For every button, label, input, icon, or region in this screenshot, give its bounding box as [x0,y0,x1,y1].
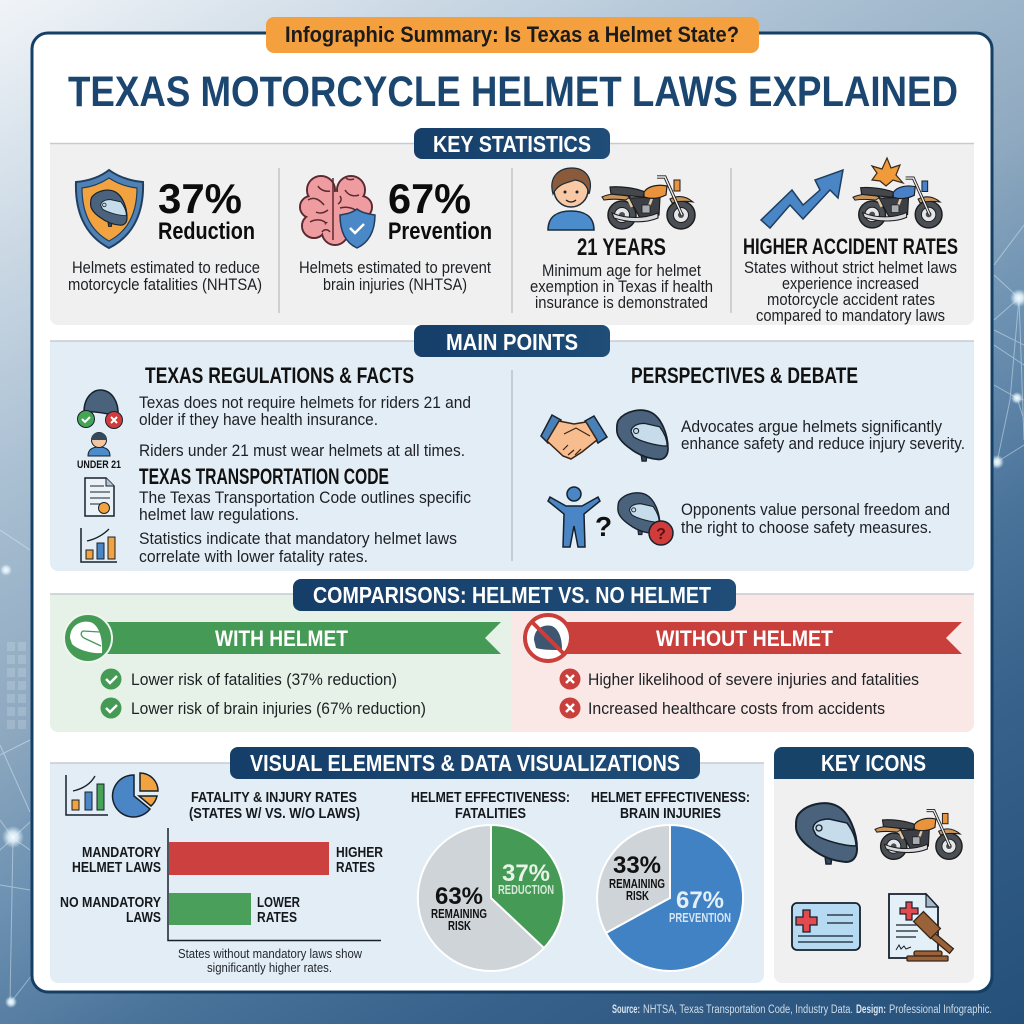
pie chart: brain injuries [591,789,750,971]
column: Texas regulations and facts: helmet law regulations. [139,505,299,524]
without helmet column [525,615,962,718]
stat: 37% reduction: Helmets estimated to reduce [72,258,260,277]
pie chart: brain injuries: HELMET EFFECTIVENESS: [591,789,750,806]
icon: handshake [541,415,607,459]
panel: main points [50,325,974,571]
icon: helmet with question badge [618,493,673,545]
column: perspectives and debate: the right to choose safety measures. [681,518,932,537]
icon: chart [66,775,108,815]
stat: 21 years [530,168,713,312]
icon: helmet with question badge: ? [656,526,666,543]
pie chart: fatalities: REDUCTION [498,882,554,897]
heading: key statistics: KEY STATISTICS [433,131,591,157]
panel: key icons [774,747,974,983]
icon: young rider [548,168,594,230]
stat: 67% prevention: Prevention [388,218,492,245]
bar chart: fatality and injury rates: FATALITY & INJURY RATES [191,789,357,806]
bar chart: fatality and injury rates [60,789,383,975]
footer: source line: Professional Infographic. [889,1004,992,1016]
heading: main points: MAIN POINTS [446,329,578,355]
stat: 67% prevention: brain injuries (NHTSA) [323,275,467,294]
column: Texas regulations and facts: Statistics indicate that mandatory helmet laws [139,529,457,548]
footer: source line: Source: [612,1004,640,1016]
bar chart: fatality and injury rates: significantly higher rates. [207,960,332,975]
pie chart: fatalities: HELMET EFFECTIVENESS: [411,789,570,806]
panel: comparisons [50,579,974,732]
stat: 37% reduction: Reduction [158,218,255,245]
column: perspectives and debate: Opponents value personal freedom and [681,500,950,519]
item: healthcare costs: Increased healthcare costs from accidents [588,699,885,718]
bar chart: fatality and injury rates: States without mandatory laws show [178,946,363,961]
pie chart: brain injuries: RISK [626,888,649,903]
icon: brain with shield [300,176,375,248]
with helmet column [64,614,501,718]
stat: higher accident rates: HIGHER ACCIDENT RATES [743,234,958,259]
icon: crash burst [872,158,903,186]
pie chart: brain injuries: PREVENTION [669,910,731,925]
column: Texas regulations and facts [77,363,471,566]
heading: key icons [774,747,974,779]
column: Texas regulations and facts: older if they have health insurance. [139,410,378,429]
ribbon: with helmet: WITH HELMET [215,626,348,651]
icon: helmet [617,410,668,461]
column: perspectives and debate: PERSPECTIVES & DEBATE [631,363,858,388]
heading: main points [414,325,610,357]
icon: question mark: ? [595,511,612,542]
stat: 21 years: Minimum age for helmet [542,261,701,280]
item: lower fatalities: Lower risk of fatalities (37% reduction) [131,670,397,689]
column: perspectives and debate: enhance safety and reduce injury severity. [681,434,965,453]
footer: source line: NHTSA, Texas Transportation Code, Industry Data. [643,1004,853,1016]
icon: blue motorcycle [853,178,942,228]
pie chart: brain injuries: REMAINING [609,876,665,891]
heading: visual elements: VISUAL ELEMENTS & DATA VISUALIZATIONS [250,750,680,776]
column: Texas regulations and facts: Texas does not require helmets for riders 21 and [139,393,471,412]
icon: insurance card [792,903,860,950]
ribbon: without helmet [525,615,962,661]
ribbon: with helmet [64,614,501,662]
icon: rider under 21 [77,432,121,471]
stat: higher accident rates: motorcycle accident rates [767,290,935,309]
pie chart: fatalities [411,789,570,971]
footer: source line: Design: [856,1004,886,1016]
stat: 37% reduction [68,170,262,294]
stat: 21 years: exemption in Texas if health [530,277,713,296]
pie chart: fatalities: RISK [448,918,471,933]
panel: key statistics [50,128,974,325]
pie chart: brain injuries: 67% [676,887,724,914]
bar chart: fatality and injury rates: (STATES W/ VS. W/O LAWS) [189,805,360,822]
footer: source line [612,1004,992,1016]
icon: rider under 21: UNDER 21 [77,459,121,471]
item: severe injuries: Higher likelihood of severe injuries and fatalities [588,670,919,689]
stat: 37% reduction: 37% [158,175,242,222]
heading: key icons: KEY ICONS [821,750,926,776]
pie chart: fatalities: 63% [435,883,483,910]
icon: motorcycle [602,177,695,229]
column: perspectives and debate: Advocates argue helmets significantly [681,417,942,436]
pie chart: brain injuries: BRAIN INJURIES [620,805,721,822]
stat: higher accident rates: States without strict helmet laws [744,258,957,277]
top badge [266,17,759,53]
pie chart: brain injuries: 33% [613,852,661,879]
bar chart: fatality and injury rates: LAWS [126,909,161,926]
column: Texas regulations and facts: correlate with lower fatality rates. [139,547,368,566]
bar chart: fatality and injury rates: NO MANDATORY [60,894,161,911]
ribbon: without helmet: WITHOUT HELMET [656,626,833,651]
icon: small bar chart [81,528,117,562]
pie chart: fatalities: FATALITIES [455,805,526,822]
bar chart: fatality and injury rates: MANDATORY [82,844,161,861]
bar chart: fatality and injury rates: RATES [336,859,375,876]
stat: 67% prevention: Helmets estimated to prevent [299,258,491,277]
icon: rising arrow [761,170,843,228]
icon: certificate document [85,478,114,516]
pie chart: fatalities: 37% [502,860,550,887]
stat: 37% reduction: motorcycle fatalities (NHTSA) [68,275,262,294]
icon: person with arms raised [548,487,600,547]
stat: higher accident rates: compared to mandatory laws [756,306,945,325]
item: lower brain injuries: Lower risk of brain injuries (67% reduction) [131,699,426,718]
icon: motorcycle [875,811,962,859]
stat: higher accident rates [743,158,958,325]
icon: helmet with check and cross [78,390,122,428]
column: Texas regulations and facts: TEXAS TRANSPORTATION CODE [139,464,389,489]
icon: legal medical document with gavel [889,894,953,961]
column: perspectives and debate [541,363,965,547]
panel: visual elements and data visualizations [50,747,764,983]
stat: 21 years: insurance is demonstrated [535,293,708,312]
stat: 67% prevention: 67% [388,175,471,222]
heading: comparisons: COMPARISONS: HELMET VS. NO HELMET [313,582,711,608]
column: Texas regulations and facts: Riders under 21 must wear helmets at all times. [139,441,465,460]
stat: 21 years: 21 YEARS [577,234,666,261]
pie chart: fatalities: REMAINING [431,906,487,921]
bar chart: fatality and injury rates: HIGHER [336,844,383,861]
bar chart: fatality and injury rates: HELMET LAWS [72,859,161,876]
column: Texas regulations and facts: The Texas Transportation Code outlines specific [139,488,471,507]
bar chart: fatality and injury rates: RATES [257,909,297,926]
stat: 67% prevention [299,175,492,294]
bar chart: fatality and injury rates: LOWER [257,894,300,911]
top badge: Infographic Summary: Is Texas a Helmet State? [285,22,739,47]
icon: helmet [796,803,857,864]
icon: helmet shield [76,170,143,248]
stat: higher accident rates: experience increased [782,274,919,293]
column: Texas regulations and facts: TEXAS REGULATIONS & FACTS [145,363,414,388]
icon: pie [113,773,158,817]
